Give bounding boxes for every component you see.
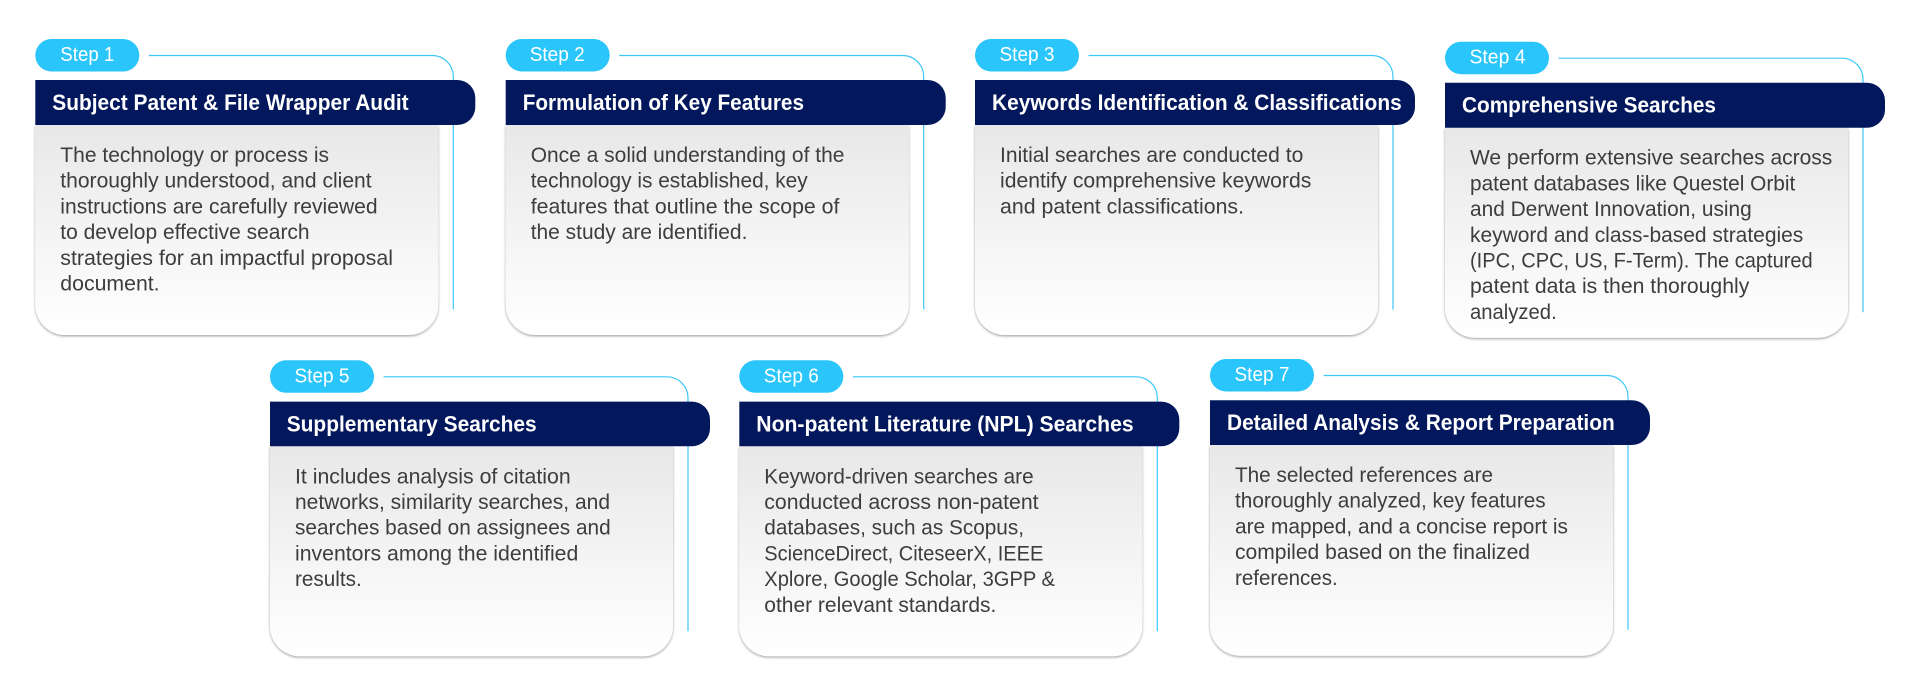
body text: step 3: Initial searches are conducted to xyxy=(1000,144,1303,167)
body text: step 4: and Derwent Innovation, using xyxy=(1470,198,1752,221)
body text: step 5: searches based on assignees and xyxy=(295,517,611,540)
card body: step 2 xyxy=(506,125,909,335)
panel: step 6 xyxy=(739,360,1179,656)
body text: step 7: are mapped, and a concise report is xyxy=(1235,515,1568,538)
step label: step 5: Step 5 xyxy=(294,365,350,387)
panel: step 1 xyxy=(35,39,475,335)
body text: step 2: Once a solid understanding of the xyxy=(531,144,844,167)
body text: step 2 xyxy=(531,144,844,244)
connector line: step 7 xyxy=(1324,376,1628,630)
body text: step 3: and patent classifications. xyxy=(1000,195,1244,218)
step pill: step 4 xyxy=(1445,42,1549,74)
header bar: step 2 xyxy=(506,80,946,125)
card body: step 4 xyxy=(1445,128,1848,338)
step label: step 1: Step 1 xyxy=(60,44,114,66)
body text: step 7: compiled based on the finalized xyxy=(1235,541,1530,564)
connector line: step 6 xyxy=(853,377,1157,631)
header bar: step 5 xyxy=(270,402,710,446)
body text: step 1: thoroughly understood, and client xyxy=(60,170,372,193)
step pill: step 7 xyxy=(1210,359,1314,392)
step label: step 7: Step 7 xyxy=(1234,364,1290,386)
body text: step 6: Keyword-driven searches are xyxy=(764,465,1034,488)
body text: step 3 xyxy=(1000,144,1311,218)
card body: step 1 xyxy=(35,125,438,335)
card body: step 5 xyxy=(270,446,673,656)
body text: step 4: analyzed. xyxy=(1470,301,1557,324)
body text: step 1: instructions are carefully reviewed xyxy=(60,195,378,218)
step pill: step 2 xyxy=(506,39,610,72)
header bar: step 6 xyxy=(739,402,1179,446)
body text: step 5: results. xyxy=(295,568,362,591)
header bar: step 4 xyxy=(1445,83,1885,128)
panel: step 4 xyxy=(1445,42,1885,338)
heading: step 5: Supplementary Searches xyxy=(287,411,537,436)
step pill: step 1 xyxy=(35,39,139,72)
body text: step 4: (IPC, CPC, US, F-Term). The captured xyxy=(1470,250,1813,273)
body text: step 4: patent databases like Questel Orbit xyxy=(1470,172,1795,195)
body text: step 4: keyword and class-based strategies xyxy=(1470,224,1803,247)
step pill: step 6 xyxy=(739,360,843,393)
body text: step 5 xyxy=(295,465,611,591)
connector line: step 4 xyxy=(1558,58,1863,312)
panel: step 2 xyxy=(506,39,946,335)
heading: step 4: Comprehensive Searches xyxy=(1462,93,1716,118)
body text: step 2: the study are identified. xyxy=(531,221,747,244)
heading: step 6: Non-patent Literature (NPL) Searches xyxy=(756,411,1134,436)
body text: step 5: inventors among the identified xyxy=(295,542,578,565)
body text: step 4: We perform extensive searches across xyxy=(1470,147,1832,170)
connector line: step 2 xyxy=(619,56,924,310)
body text: step 3: identify comprehensive keywords xyxy=(1000,170,1311,193)
panel: step 5 xyxy=(270,360,710,656)
body text: step 2: features that outline the scope of xyxy=(531,195,840,218)
connector line: step 5 xyxy=(384,377,688,631)
body text: step 1: The technology or process is xyxy=(60,144,329,167)
heading: step 7: Detailed Analysis & Report Preparation xyxy=(1227,410,1615,435)
body text: step 5: networks, similarity searches, and xyxy=(295,491,610,514)
step label: step 4: Step 4 xyxy=(1470,47,1526,69)
body text: step 7: thoroughly analyzed, key features xyxy=(1235,490,1546,513)
heading: step 2: Formulation of Key Features xyxy=(523,90,804,115)
body text: step 6: other relevant standards. xyxy=(764,594,996,617)
body text: step 1: to develop effective search xyxy=(60,221,310,244)
card body: step 3 xyxy=(975,125,1378,335)
header bar: step 1 xyxy=(35,80,475,125)
step label: step 2: Step 2 xyxy=(530,44,585,66)
body text: step 4 xyxy=(1470,147,1832,324)
body text: step 6: databases, such as Scopus, xyxy=(764,517,1024,540)
card body: step 6 xyxy=(739,446,1142,656)
body text: step 1 xyxy=(60,144,393,296)
step pill: step 3 xyxy=(975,39,1079,72)
body text: step 5: It includes analysis of citation xyxy=(295,465,571,488)
heading: step 1: Subject Patent & File Wrapper Audit xyxy=(52,90,409,115)
body text: step 1: strategies for an impactful proposal xyxy=(60,247,393,270)
connector line: step 3 xyxy=(1088,56,1393,310)
panel: step 3 xyxy=(975,39,1415,335)
body text: step 7: references. xyxy=(1235,567,1338,590)
step label: step 6: Step 6 xyxy=(764,365,819,387)
body text: step 4: patent data is then thoroughly xyxy=(1470,275,1750,298)
body text: step 6: conducted across non-patent xyxy=(764,491,1039,514)
body text: step 2: technology is established, key xyxy=(531,170,808,193)
body text: step 6: ScienceDirect, CiteseerX, IEEE xyxy=(764,542,1043,565)
card body: step 7 xyxy=(1210,445,1613,656)
step label: step 3: Step 3 xyxy=(1000,44,1054,66)
body text: step 7: The selected references are xyxy=(1235,464,1493,487)
connector line: step 1 xyxy=(149,56,453,310)
body text: step 7 xyxy=(1235,464,1568,590)
heading: step 3: Keywords Identification & Classifications xyxy=(992,90,1402,115)
step pill: step 5 xyxy=(270,360,374,393)
body text: step 6 xyxy=(764,465,1055,617)
header bar: step 7 xyxy=(1210,400,1650,445)
body text: step 6: Xplore, Google Scholar, 3GPP & xyxy=(764,568,1055,591)
header bar: step 3 xyxy=(975,80,1415,125)
body text: step 1: document. xyxy=(60,272,160,296)
panel: step 7 xyxy=(1210,359,1650,656)
